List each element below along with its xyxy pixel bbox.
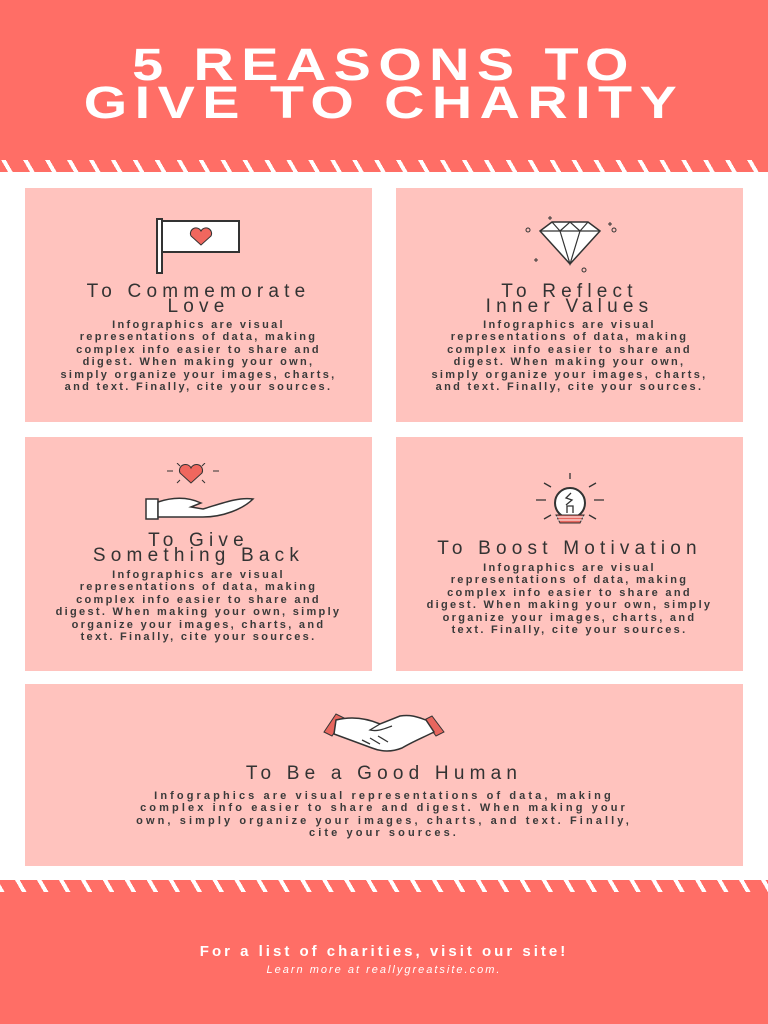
heading [486, 281, 653, 317]
icon: handshake [323, 713, 445, 752]
text: Infographics are visual [112, 319, 285, 331]
heading: Love [167, 296, 230, 317]
text: Infographics are visual representations of data, making [154, 790, 614, 802]
icon: flag with heart [156, 218, 240, 274]
text: organize your images, charts, and [443, 612, 696, 624]
text: own, simply organize your images, charts, and text. Finally, [136, 815, 632, 827]
text [432, 319, 707, 393]
panel: good human [25, 684, 743, 866]
text: complex info easier to share and [76, 344, 321, 356]
heading [93, 530, 304, 566]
text: simply organize your images, charts, [60, 369, 336, 381]
title: GIVE TO CHARITY [84, 77, 684, 128]
text: complex info easier to share and [447, 587, 692, 599]
text [427, 562, 712, 636]
icon: light bulb [536, 473, 604, 524]
panel: boost motivation [396, 437, 743, 671]
text: text. Finally, cite your sources. [81, 631, 316, 643]
footer link: Learn more at reallygreatsite.com. [267, 964, 501, 976]
text: complex info easier to share and [447, 344, 692, 356]
text [60, 319, 336, 393]
heading: To Boost Motivation [437, 538, 702, 559]
text: Infographics are visual [483, 562, 656, 574]
heading: To Commemorate [87, 281, 310, 302]
text: simply organize your images, charts, [432, 369, 707, 381]
icon: hand with heart [145, 463, 254, 520]
text: digest. When making your own, simply [56, 606, 341, 618]
heading: To Give [148, 530, 249, 551]
text: digest. When making your own, [83, 356, 314, 368]
text: representations of data, making [451, 331, 688, 343]
text: complex info easier to share and [76, 594, 321, 606]
panel: commemorate love [25, 188, 372, 422]
footer [0, 880, 768, 1024]
text: digest. When making your own, simply [427, 599, 712, 611]
heading: To Be a Good Human [246, 763, 522, 784]
text: Infographics are visual [483, 319, 656, 331]
heading: Inner Values [486, 296, 653, 317]
text: cite your sources. [309, 827, 459, 839]
text: and text. Finally, cite your sources. [436, 381, 703, 393]
text: text. Finally, cite your sources. [452, 624, 687, 636]
heading: To Reflect [501, 281, 638, 302]
text: digest. When making your own, [454, 356, 685, 368]
header [0, 0, 768, 172]
heading: Something Back [93, 545, 304, 566]
text: representations of data, making [451, 574, 688, 586]
title [84, 39, 684, 128]
heading [87, 281, 310, 317]
text: organize your images, charts, and [72, 619, 325, 631]
text: complex info easier to share and digest. When making your [140, 802, 628, 814]
text: and text. Finally, cite your sources. [65, 381, 332, 393]
footer cta: For a list of charities, visit our site! [200, 943, 568, 960]
text: Infographics are visual [112, 569, 285, 581]
text [56, 569, 341, 643]
icon: diamond [526, 216, 616, 272]
panel: give back [25, 437, 372, 671]
text [136, 790, 632, 839]
text: representations of data, making [80, 581, 317, 593]
text: representations of data, making [80, 331, 317, 343]
title: 5 REASONS TO [132, 39, 636, 90]
panel: inner values [396, 188, 743, 422]
